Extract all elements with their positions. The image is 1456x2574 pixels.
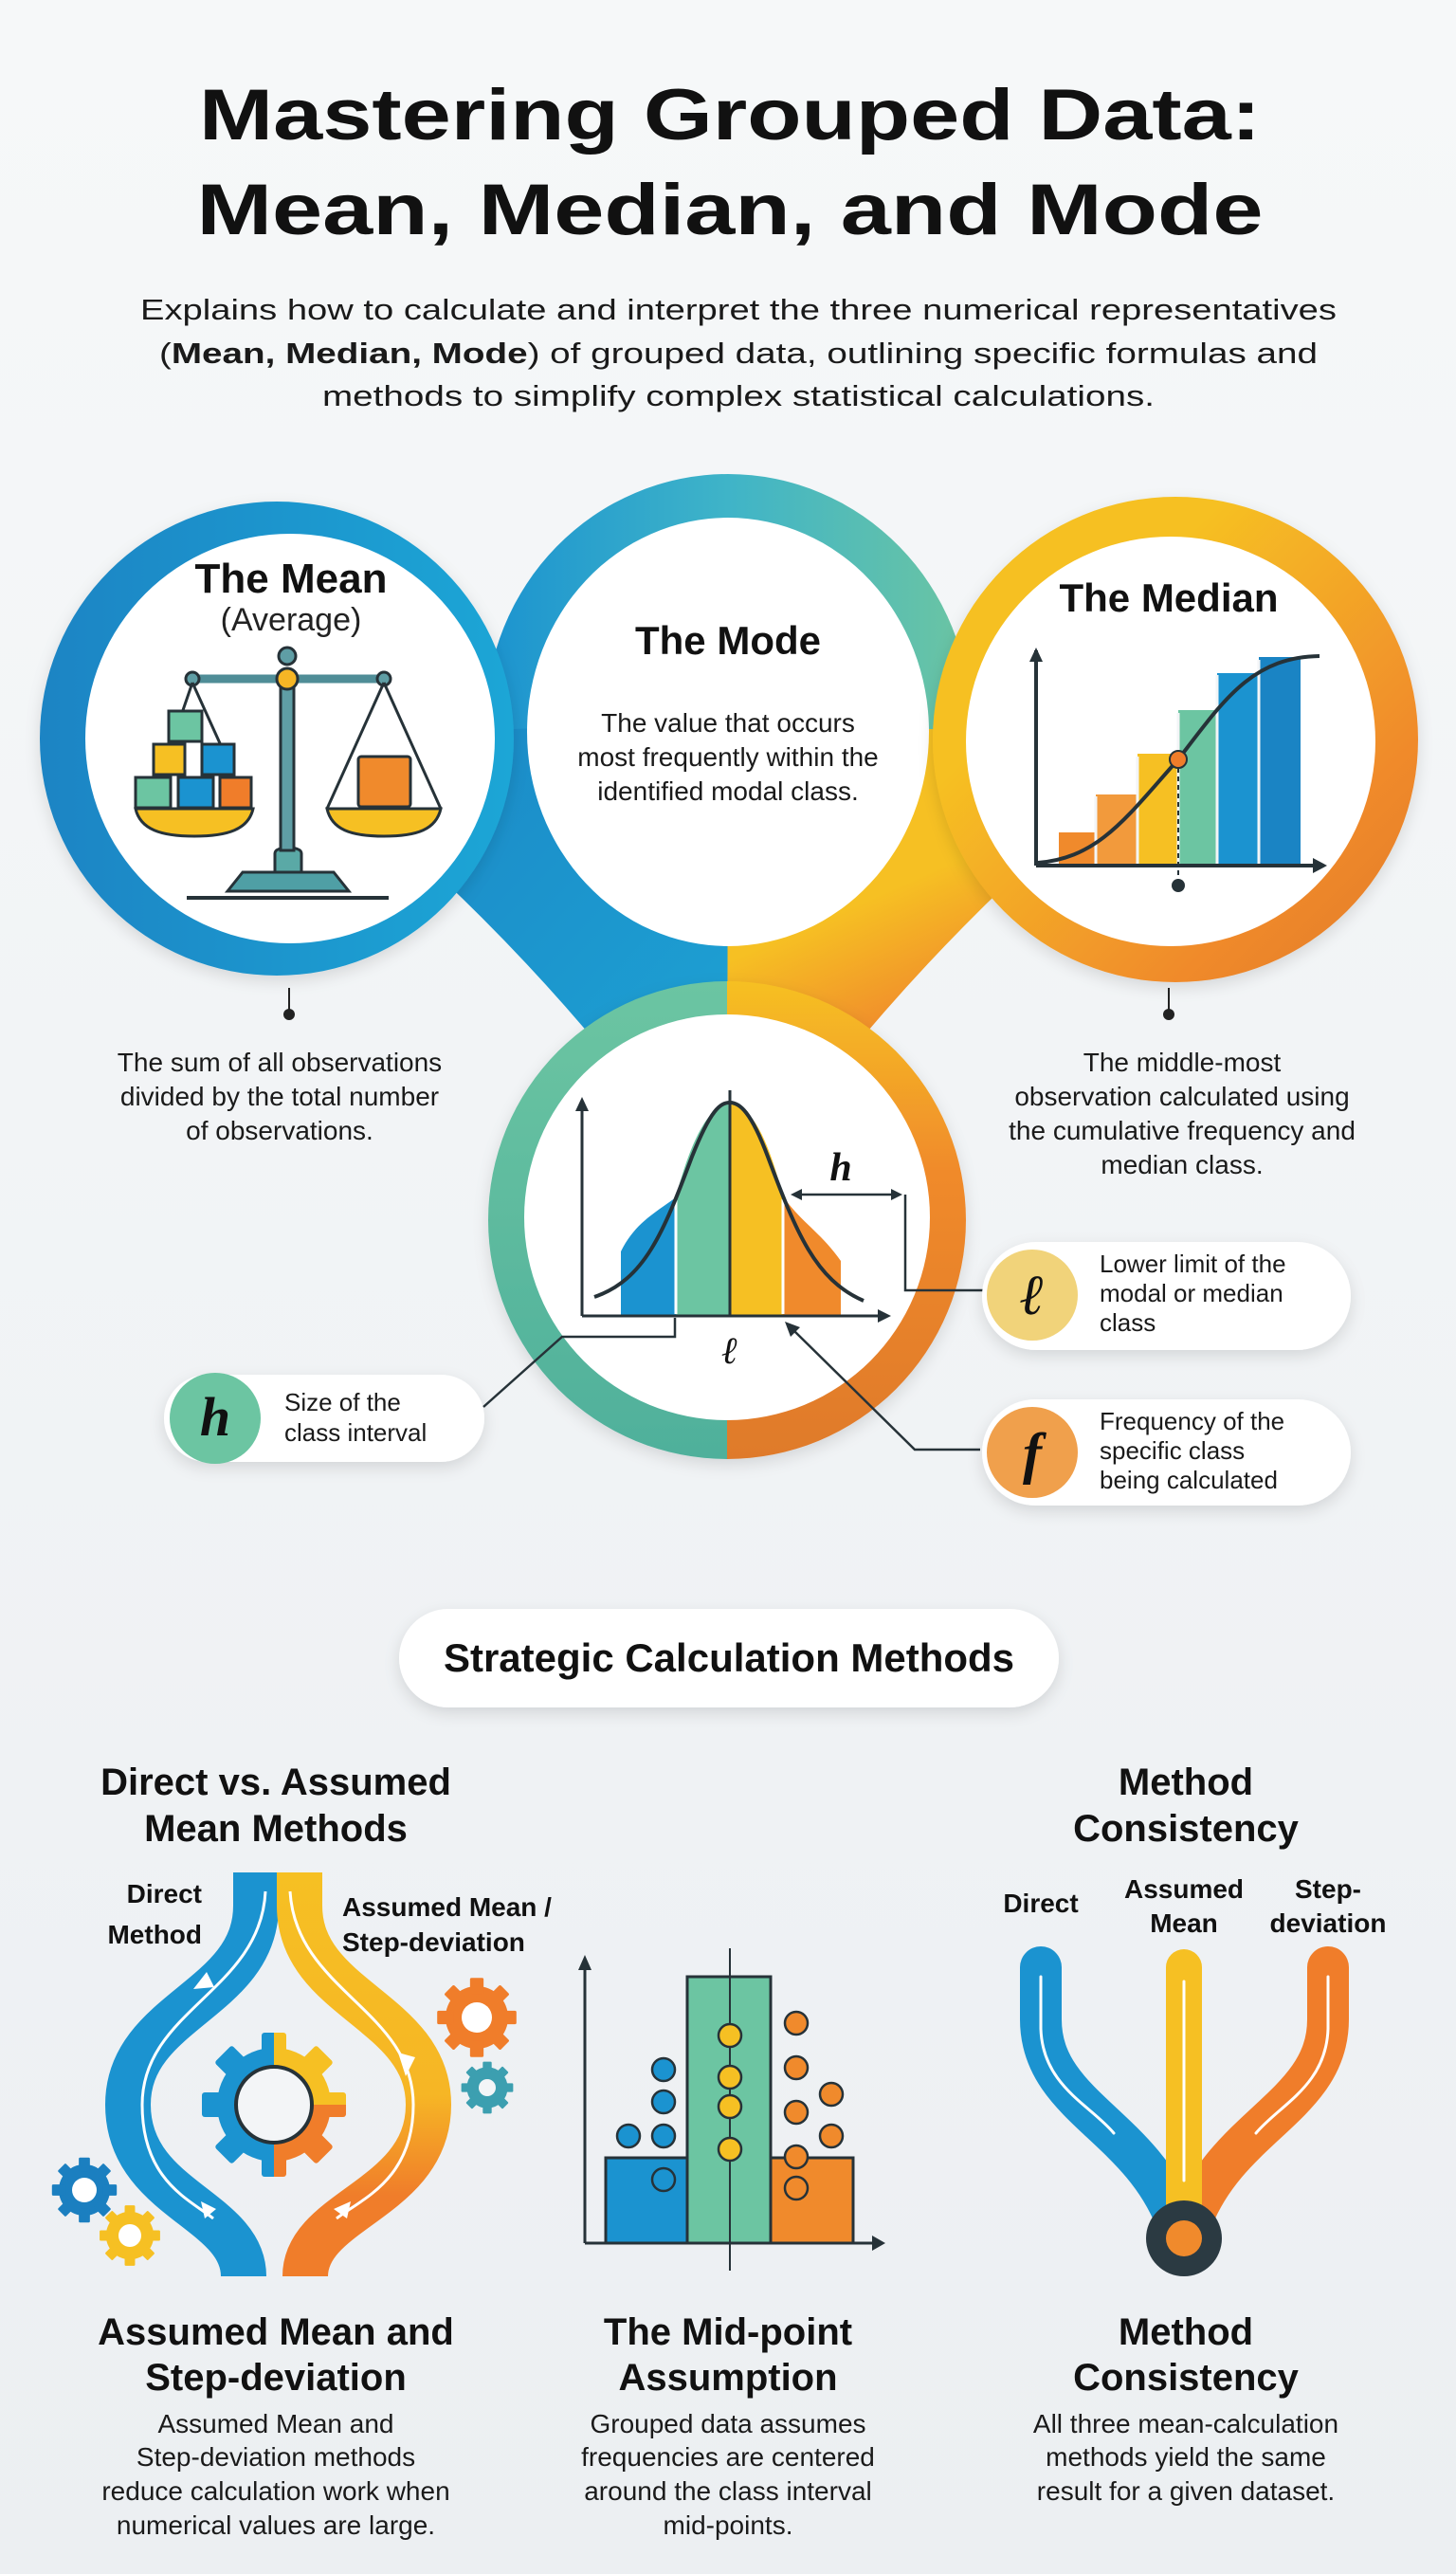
callout: lower limit l: ℓ [1020,1264,1045,1326]
title [197,75,1263,250]
text: mode description: identified modal class. [597,776,859,806]
panel: the mode [577,618,879,806]
callout: lower limit l: modal or median [1100,1279,1283,1307]
text: consistency description: methods yield the same [1046,2442,1326,2472]
text: median description: observation calculated using [1014,1082,1350,1111]
heading: method consistency bottom [1073,2311,1300,2399]
subtitle: Explains how to calculate and interpret the three numerical representatives [140,293,1337,326]
heading: method consistency top: Method [1119,1762,1253,1803]
callout: frequency f: being calculated [1100,1466,1278,1494]
connector: blue blob [277,721,728,1217]
heading: mid-point assumption [604,2311,852,2399]
subtitle: methods to simplify complex statistical calculations. [322,379,1155,412]
label: assumed mean step-deviation: Assumed Mean / [342,1892,552,1922]
icon: small gears [52,1978,517,2266]
icon: convergence node [1146,2200,1222,2276]
label: l symbol: ℓ [721,1329,738,1372]
label: h arrow: h [829,1146,852,1190]
text: mid-point description: Grouped data assumes [590,2409,866,2438]
title: Mean, Median, and Mode [197,170,1263,250]
label: assumed mean step-deviation [342,1892,552,1957]
section header pill: Strategic Calculation Methods [444,1635,1014,1680]
heading: direct vs assumed: Mean Methods [144,1808,408,1850]
chart: histogram with mid-point dots [578,1948,885,2271]
heading: mid-point assumption: The Mid-point [604,2311,852,2353]
callout: frequency f: f [1023,1422,1046,1485]
text: assumed mean description [101,2409,450,2540]
callout: class interval h: h [200,1386,230,1448]
text: assumed mean description: Assumed Mean and [157,2409,394,2438]
icon: converging paths [1041,1967,1328,2218]
text: mean description [118,988,442,1145]
heading: assumed mean and step-deviation: Assumed Mean and [98,2311,454,2353]
heading: method consistency bottom: Consistency [1073,2357,1300,2399]
heading: method consistency top: Consistency [1073,1808,1300,1850]
text: median description: the cumulative frequency and [1009,1116,1356,1145]
callout: lower limit l: class [1100,1308,1156,1337]
label: direct method: Direct [127,1879,202,1908]
text: mean description: The sum of all observations [118,1048,442,1077]
heading: assumed mean and step-deviation [98,2311,454,2399]
text: median description [1009,988,1356,1179]
text: consistency description [1033,2409,1338,2506]
text: median description: The middle-most [1083,1048,1281,1077]
text: consistency description: result for a given dataset. [1037,2476,1335,2506]
label: three method names: deviation [1270,1908,1386,1938]
mode interior [527,518,929,946]
panel: the mean [118,556,442,1145]
label: three method names: Assumed [1124,1874,1244,1904]
label: assumed mean step-deviation: Step-deviation [342,1927,525,1957]
label: three method names: Step- [1295,1874,1361,1904]
subtitle [140,293,1337,412]
circle: median ring [933,497,1418,982]
panel: direct vs assumed mean [52,1762,552,2540]
icon: balance scale [136,648,441,898]
text: mid-point description [581,2409,875,2540]
heading: direct vs assumed: Direct vs. Assumed [100,1762,451,1803]
text: consistency description: All three mean-calculation [1033,2409,1338,2438]
connected circles diagram [40,474,1418,1459]
label: three method names [1003,1874,1386,1938]
callout: class interval h [164,1373,484,1464]
label: direct method: Method [107,1920,202,1949]
section header pill [399,1609,1059,1707]
connector: yellow orange blob [727,721,1175,1217]
text: mid-point description: frequencies are centered [581,2442,875,2472]
text: mid-point description: around the class interval [584,2476,872,2506]
circle: mode ring [485,474,971,971]
chart: cumulative frequency ogive [1029,648,1327,892]
heading: method consistency bottom: Method [1119,2311,1253,2353]
text: assumed mean description: Step-deviation methods [136,2442,415,2472]
text: mode description: most frequently within the [577,742,879,772]
callout: lower limit l: Lower limit of the [1100,1250,1286,1278]
icon: pipes with arrows [128,1872,428,2276]
panel: the median [1009,575,1356,1179]
callout: class interval h: class interval [284,1418,427,1447]
circle: center formula ring [488,981,966,1459]
panel: method consistency [1003,1762,1386,2506]
heading: the mode: The Mode [635,618,821,663]
heading: the mean: The Mean [195,556,387,602]
text: mode description [577,708,879,806]
subtitle: (Mean, Median, Mode ) of grouped data, outlining specific formulas and [159,337,1318,370]
title: Mastering Grouped Data: [199,75,1261,155]
text: mean description: of observations. [186,1116,373,1145]
callout: frequency f: Frequency of the [1100,1407,1284,1435]
callout: frequency f [982,1399,1351,1506]
heading: assumed mean and step-deviation: Step-deviation [145,2357,407,2399]
text: mid-point description: mid-points. [664,2510,792,2540]
callout: frequency f: specific class [1100,1436,1245,1465]
text: mode description: The value that occurs [601,708,855,738]
callout: lower limit l [982,1242,1351,1350]
heading: mid-point assumption: Assumption [618,2357,838,2399]
circle: mean ring [40,502,514,976]
label: direct method [107,1879,202,1949]
label: three method names: Mean [1150,1908,1218,1938]
heading: the median: The Median [1059,575,1279,620]
text: assumed mean description: numerical values are large. [117,2510,435,2540]
heading: method consistency top [1073,1762,1300,1850]
text: assumed mean description: reduce calculation work when [101,2476,450,2506]
panel: the mean: (Average) [221,602,361,638]
label: h arrow [791,1146,902,1200]
label: three method names: Direct [1003,1889,1079,1918]
callout: class interval h: Size of the [284,1388,401,1416]
icon: central gear [202,2033,346,2177]
chart: bell curve with formula labels [483,1090,986,1450]
panel: mid-point assumption [578,1948,885,2540]
heading: direct vs assumed [100,1762,451,1850]
text: mean description: divided by the total number [120,1082,439,1111]
text: median description: median class. [1101,1150,1264,1179]
